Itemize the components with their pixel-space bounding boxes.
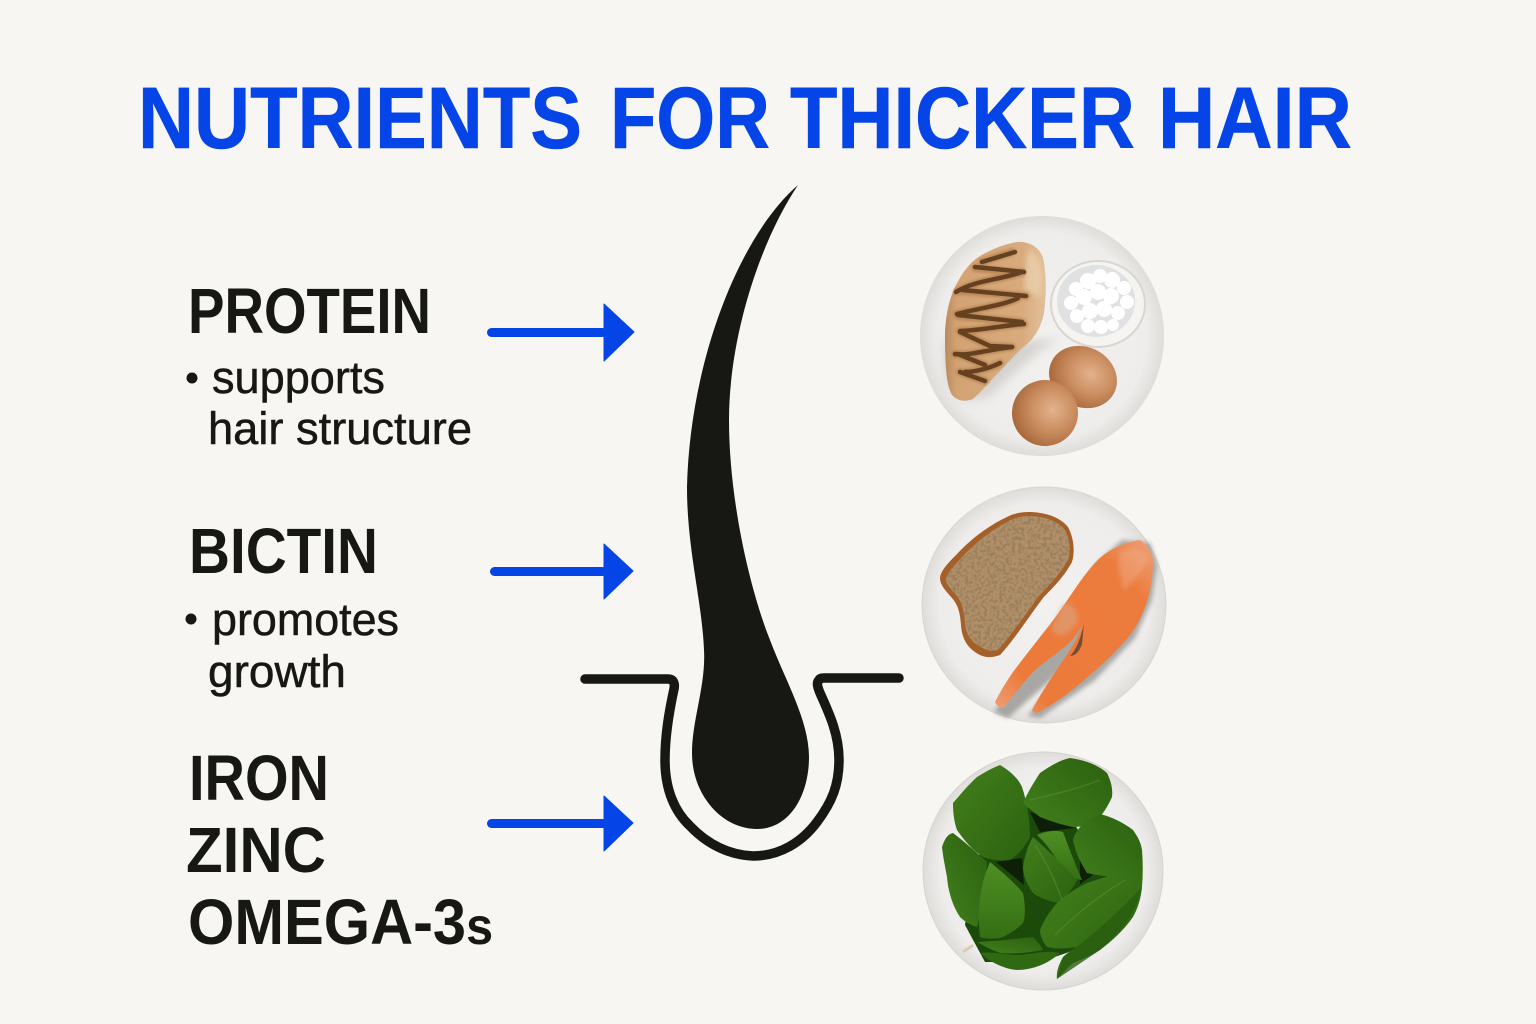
text block: iron, zinc, omega-3s: ZINC [186,814,326,886]
heading: biotin: BICTIN [189,515,378,587]
title [138,70,1352,167]
icon: grilled chicken [945,242,1046,401]
text block: iron, zinc, omega-3s: OMEGA-3s [188,886,493,958]
description: protein: hair structure [208,403,472,454]
title: THICKER [790,70,1135,167]
title: HAIR [1158,70,1352,167]
bullet: protein [186,372,198,384]
description: protein [208,352,472,454]
description: biotin [208,594,399,697]
text block: iron, zinc, omega-3s: IRON [189,742,329,814]
panel: protein foods plate [920,216,1164,458]
icon: spinach leaves [942,758,1143,979]
arrow: iron, zinc, omega-3s to follicle [487,796,633,851]
icon: bread slice [940,512,1074,657]
shadow under food [944,340,1060,399]
follicle outline [585,678,899,856]
plate [923,752,1163,990]
arrow: protein to hair [487,304,634,361]
icon: salmon steak [994,540,1157,718]
arrow: biotin to hair [490,544,633,599]
title: FOR [610,70,770,167]
diagram: hair and follicle [585,185,899,856]
heading: protein: PROTEIN [188,275,431,347]
plate [922,487,1166,723]
icon: eggs [1000,334,1128,458]
text block: iron, zinc, omega-3s [186,742,493,958]
plate [920,216,1164,456]
panel: iron, zinc and omega-3 foods plate [923,752,1163,990]
text block: biotin [186,515,399,697]
icon: bowl of cottage cheese [1051,261,1145,347]
description: biotin: promotes [212,594,399,645]
description: biotin: growth [208,646,346,697]
text block: protein [186,275,472,454]
panel: biotin foods plate [922,487,1166,723]
description: protein: supports [212,352,385,403]
bullet: biotin [186,614,196,624]
title: NUTRIENTS [138,70,582,167]
hair strand and bulb [687,185,809,829]
